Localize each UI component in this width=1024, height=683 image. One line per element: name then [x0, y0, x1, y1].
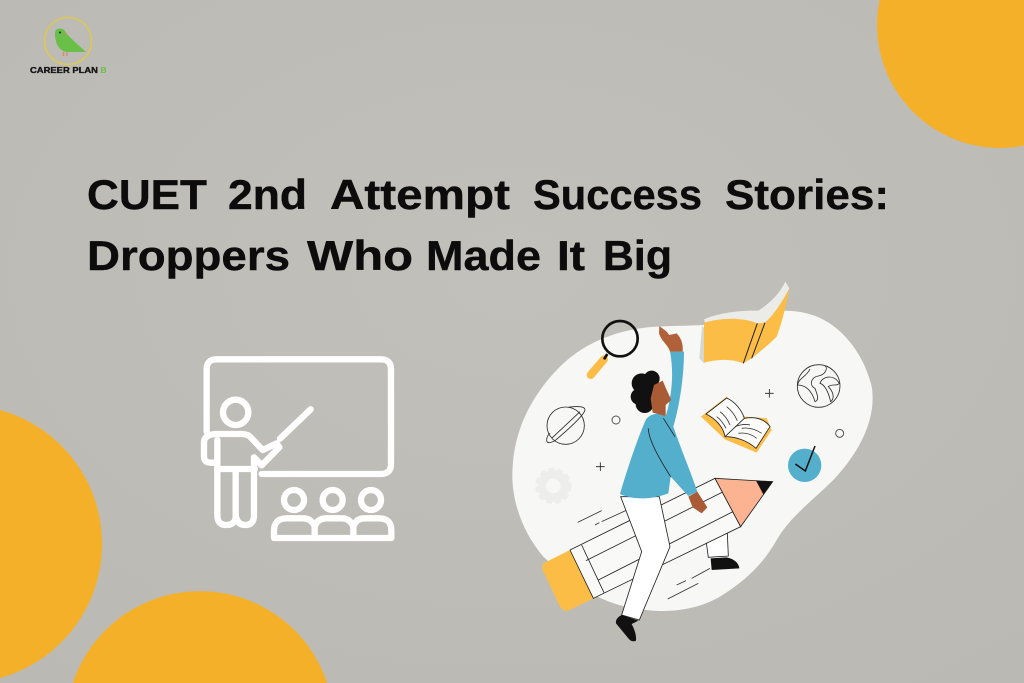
- title: Attempt: [330, 171, 510, 218]
- logo: Career Plan B: CAREER PLAN: [30, 65, 98, 75]
- title: Made: [426, 232, 541, 279]
- neck and face: [651, 381, 671, 416]
- decorative circle: left: [0, 410, 102, 678]
- flying book: [699, 282, 789, 363]
- globe: [797, 365, 840, 407]
- logo: Career Plan B: [30, 18, 107, 75]
- check badge: [788, 446, 821, 482]
- decorative circle: bottom: [73, 591, 327, 683]
- title: Success: [533, 171, 702, 218]
- hair: [631, 371, 660, 413]
- small circle right: [836, 429, 844, 437]
- title: Droppers: [87, 232, 290, 279]
- title: Big: [603, 232, 672, 279]
- logo: Career Plan B: B: [100, 65, 107, 75]
- students: [274, 490, 391, 538]
- blob backdrop: [512, 311, 873, 611]
- plus right: [765, 389, 774, 398]
- decorative circle: top right: [877, 0, 1024, 148]
- title: Who: [307, 232, 413, 279]
- speed lines: [578, 509, 710, 599]
- back leg: [706, 533, 739, 570]
- front leg: [616, 497, 670, 641]
- plus left: [596, 462, 605, 471]
- open book: [701, 397, 772, 453]
- title: CUET: [87, 171, 207, 218]
- planet: [547, 407, 585, 444]
- title: It: [557, 232, 585, 279]
- title: 2nd: [228, 171, 307, 218]
- small circle left: [612, 416, 620, 424]
- title: [87, 171, 889, 279]
- torso and raised arm: [620, 352, 697, 498]
- gear: [537, 470, 570, 502]
- magnifying glass: [591, 321, 638, 375]
- illustration: student riding pencil: [512, 282, 873, 641]
- pencil: [542, 478, 773, 611]
- hand raised: [659, 326, 683, 352]
- title: Stories:: [725, 171, 889, 218]
- icon: teacher at board with students: [204, 359, 391, 538]
- board: [207, 359, 391, 474]
- teacher: [204, 400, 311, 525]
- lower hand: [688, 492, 707, 513]
